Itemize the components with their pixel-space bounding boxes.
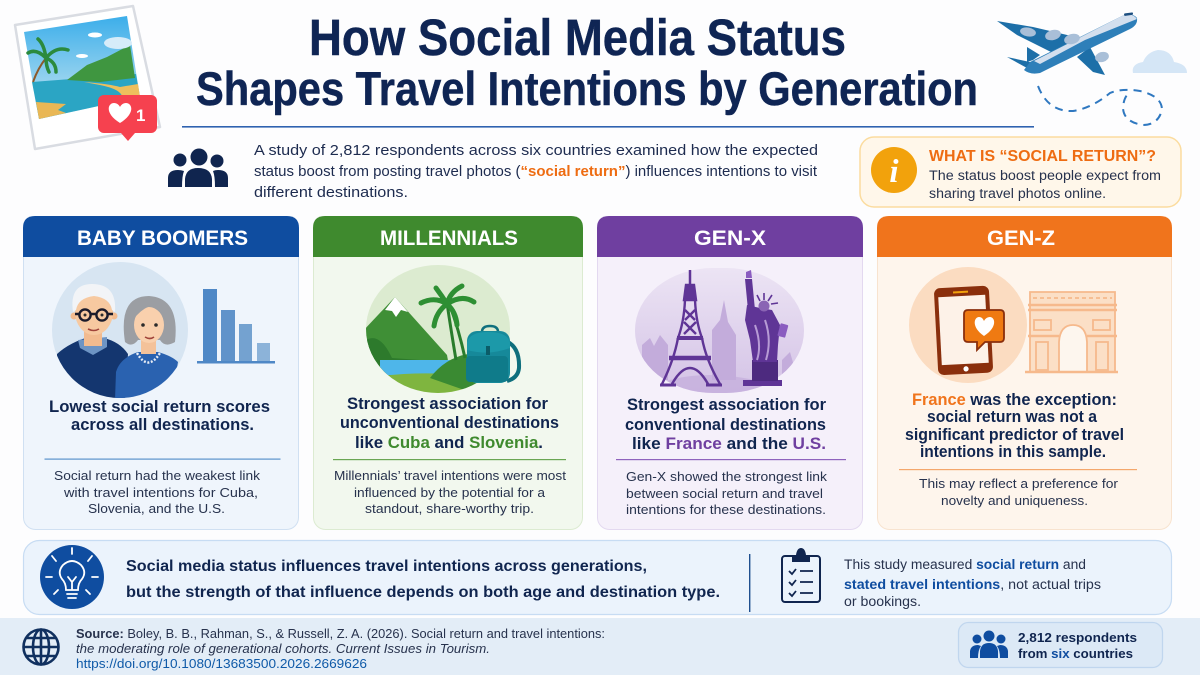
icon: info circle [871, 147, 917, 193]
key finding [625, 396, 827, 453]
detail text [626, 469, 828, 517]
icon: heart speech bubble [964, 310, 1004, 350]
detail text: intentions for these destinations. [626, 502, 826, 517]
source citation: the moderating role of generational cohorts. Current Issues in Tourism. [76, 642, 490, 656]
icon: statue of liberty [743, 270, 788, 386]
key finding: like France and the U.S. [632, 435, 826, 453]
detail text: novelty and uniqueness. [941, 493, 1088, 508]
detail text: This may reflect a preference for [919, 476, 1119, 491]
key finding: social return was not a [927, 408, 1098, 426]
respondents badge: from six countries [1018, 646, 1133, 661]
key finding: significant predictor of travel [905, 426, 1124, 444]
key finding: Strongest association for [627, 396, 827, 414]
heading: BABY BOOMERS [77, 227, 248, 250]
icon: like badge: 1 [136, 106, 145, 125]
source citation: https://doi.org/10.1080/13683500.2026.2669626 [76, 657, 367, 671]
study note: stated travel intentions , not actual trips [844, 577, 1101, 592]
source citation [76, 627, 605, 671]
key finding: conventional destinations [625, 416, 826, 434]
icon: clipboard checklist [782, 548, 820, 602]
study note: or bookings. [844, 594, 921, 609]
intro text: different destinations. [254, 184, 408, 201]
key finding: France was the exception: [912, 391, 1117, 409]
study note: This study measured social return and [844, 557, 1086, 572]
title [196, 9, 978, 115]
study note [844, 557, 1101, 609]
detail text: Social return had the weakest link [54, 468, 261, 483]
panel: takeaway band [24, 540, 1172, 614]
detail text [54, 468, 261, 516]
key finding [49, 398, 270, 434]
detail text: between social return and travel [626, 486, 823, 501]
detail text: Gen-X showed the strongest link [626, 469, 828, 484]
key finding: Strongest association for [347, 395, 549, 413]
heading: GEN-X [694, 227, 766, 250]
panel: millennials [313, 216, 583, 530]
icon: backpack [466, 326, 519, 383]
detail text [334, 468, 566, 516]
key finding: intentions in this sample. [920, 443, 1106, 461]
icon: like badge [98, 95, 157, 141]
icon: mountain, palm and backpack [362, 265, 519, 400]
icon: older couple portrait [52, 262, 188, 400]
detail text: standout, share-worthy trip. [365, 501, 534, 516]
icon: eiffel tower [660, 270, 722, 385]
icon: airplane with dashed path and cloud [997, 12, 1187, 125]
icon: arc de triomphe [1025, 292, 1118, 372]
heading: GEN-Z [987, 227, 1055, 250]
respondents badge: 2,812 respondents [1018, 630, 1137, 645]
intro text: status boost from posting travel photos (“social return”) influences intentions to visit [254, 163, 818, 180]
bar chart [197, 289, 275, 364]
icon: light bulb [40, 545, 104, 609]
icon: phone and arc de triomphe [909, 267, 1118, 383]
icon: eiffel tower and statue of liberty [635, 268, 804, 395]
detail text: Slovenia, and the U.S. [88, 501, 225, 516]
panel: baby boomers [23, 216, 299, 530]
key finding [905, 391, 1124, 461]
title: How Social Media Status [309, 9, 846, 66]
key takeaway text: Social media status influences travel intentions across generations, [126, 558, 647, 575]
icon: people group [168, 148, 228, 187]
callout: what is social return: sharing travel photos online. [929, 186, 1106, 201]
panel: footer [0, 618, 1200, 675]
detail text [919, 476, 1119, 508]
callout: what is social return: The status boost people expect from [929, 168, 1161, 183]
source citation: Source: Boley, B. B., Rahman, S., & Russell, Z. A. (2026). Social return and travel intentions: [76, 627, 605, 641]
panel: gen-z [877, 216, 1172, 530]
detail text: with travel intentions for Cuba, [63, 485, 258, 500]
respondents badge [958, 622, 1162, 668]
intro text [254, 142, 818, 201]
key takeaway text [126, 558, 720, 601]
panel: gen-x [597, 216, 863, 530]
callout: what is social return [860, 137, 1181, 207]
divider under title [182, 126, 1034, 128]
title: Shapes Travel Intentions by Generation [196, 62, 978, 115]
icon: people group small [970, 630, 1008, 658]
key finding: unconventional destinations [340, 414, 559, 432]
detail text: Millennials’ travel intentions were most [334, 468, 566, 483]
key takeaway text: but the strength of that influence depends on both age and destination type. [126, 584, 720, 601]
icon: polaroid beach photo with like badge [15, 6, 160, 149]
key finding: across all destinations. [71, 416, 254, 434]
intro text: A study of 2,812 respondents across six countries examined how the expected [254, 142, 818, 159]
icon: phone [934, 286, 993, 375]
key finding: like Cuba and Slovenia. [355, 434, 543, 452]
detail text: influenced by the potential for a [354, 485, 546, 500]
key finding [340, 395, 559, 452]
key finding: Lowest social return scores [49, 398, 270, 416]
callout: what is social return: WHAT IS “SOCIAL RETURN”? [929, 148, 1156, 165]
icon: cloud [1133, 50, 1187, 73]
icon: info circle: i [889, 154, 899, 190]
icon: globe [24, 630, 58, 664]
heading: MILLENNIALS [380, 227, 518, 250]
